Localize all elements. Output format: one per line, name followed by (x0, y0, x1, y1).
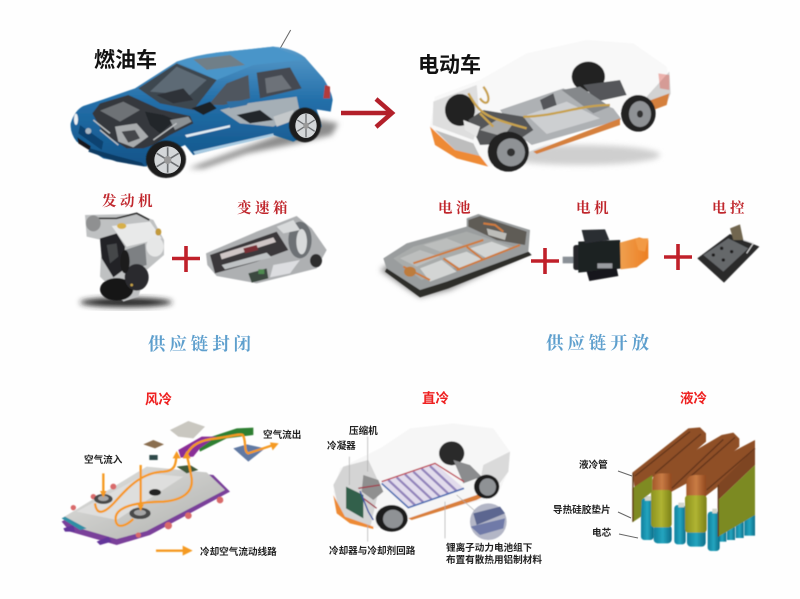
diagram: liquid cooling module (632, 427, 755, 551)
title: electric car: 电动车 (418, 54, 481, 77)
illustration: engine (80, 213, 172, 307)
diagram: air cooling battery tray (62, 421, 279, 556)
label: transmission: 变速箱 (237, 199, 291, 217)
illustration: motor (563, 229, 648, 281)
label: liquid cooling tube: 液冷管 (579, 459, 608, 471)
caption: closed supply chain: 供应链封闭 (148, 334, 255, 354)
label: air inflow: 空气流入 (84, 454, 123, 466)
heading: direct cooling: 直冷 (422, 390, 449, 406)
leader lines: liquid cooling labels (618, 471, 638, 538)
label: battery aluminium heat-dissipating material: 锂离子动力电池组下 (446, 542, 533, 554)
label: thermal silicone pad: 导热硅胶垫片 (553, 504, 611, 516)
label: condenser: 冷凝器 (327, 440, 356, 452)
icon: plus (664, 244, 692, 270)
label: compressor: 压缩机 (349, 425, 378, 437)
heading: air cooling: 风冷 (145, 391, 172, 407)
icon: plus (531, 248, 559, 274)
diagram: direct cooling car (333, 423, 510, 542)
illustration: electric car chassis (430, 40, 671, 172)
illustration: controller (697, 224, 759, 283)
label: battery: 电池 (438, 199, 474, 217)
label: motor: 电机 (576, 199, 612, 217)
label: battery cell: 电芯 (592, 527, 612, 539)
illustration: battery pack (380, 214, 532, 297)
caption: open supply chain: 供应链开放 (546, 333, 653, 353)
label: air outflow: 空气流出 (263, 429, 301, 441)
label: engine: 发动机 (102, 192, 156, 210)
illustration: fuel car cutaway (71, 30, 338, 178)
legend: cooling air route: 冷却空气流动线路 (200, 546, 277, 558)
heading: liquid cooling: 液冷 (680, 390, 708, 406)
icon: plus (172, 246, 200, 272)
illustration: transmission (206, 216, 327, 283)
title: fuel car: 燃油车 (94, 49, 157, 72)
label: chiller and coolant loop: 冷却器与冷却剂回路 (329, 545, 416, 557)
arrow: fuel car to electric car (341, 99, 392, 127)
label: controller: 电控 (712, 199, 748, 217)
label: battery aluminium heat-dissipating material: 布置有散热用铝制材料 (446, 554, 542, 566)
